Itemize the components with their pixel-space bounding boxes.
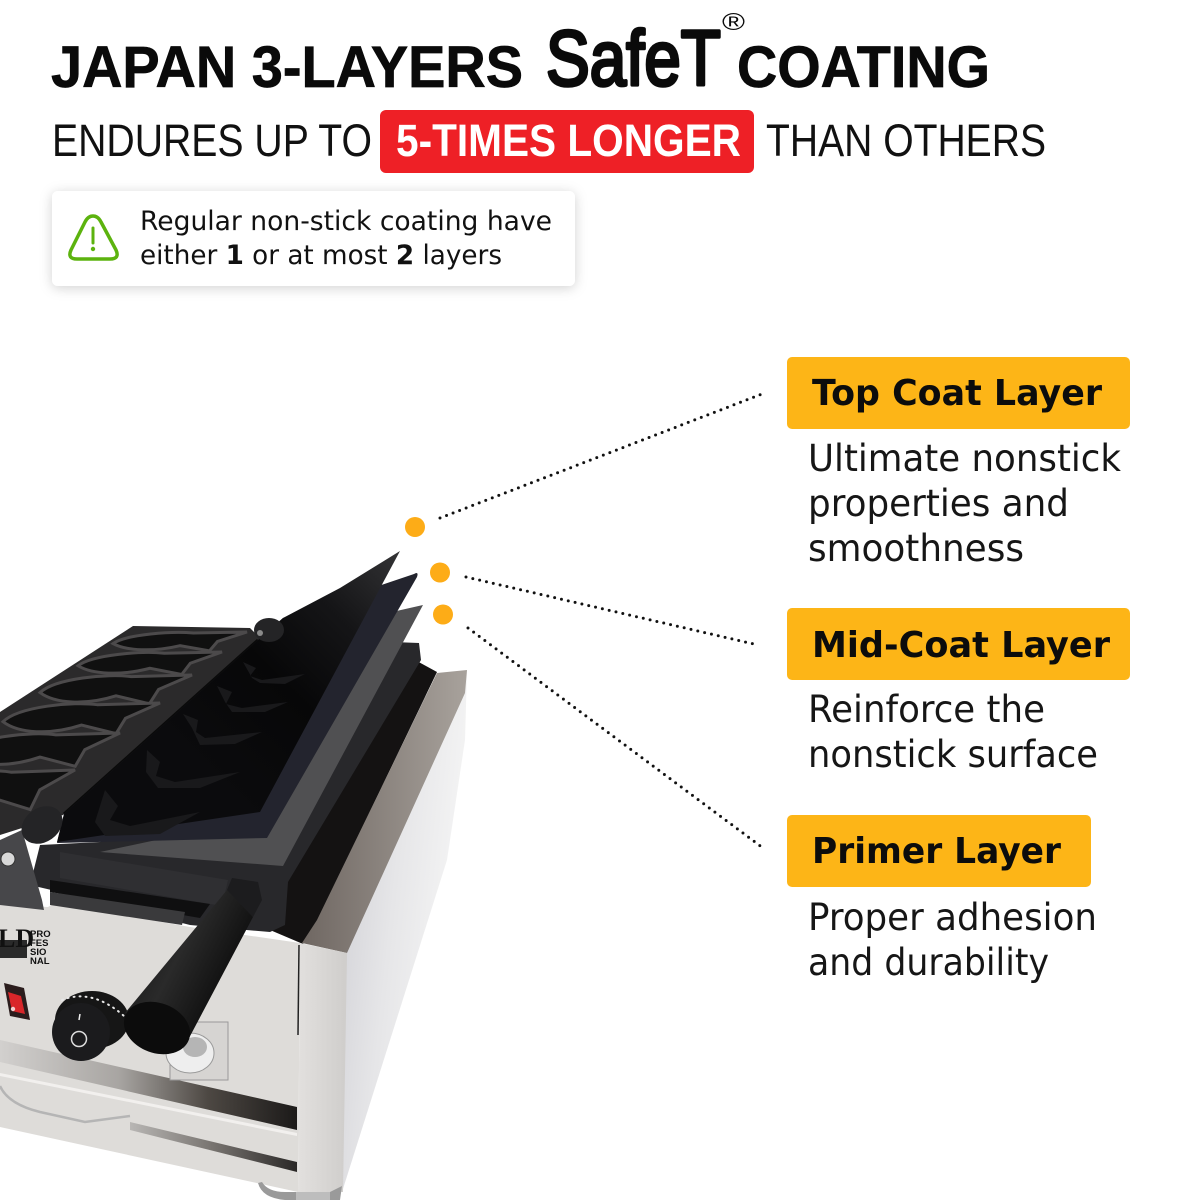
left baking plate [0,626,262,835]
power switch [4,983,30,1020]
callout: regular coating warning: Regular non-stick coating have [140,206,552,237]
brand logo: SIO [30,947,46,958]
machine inner slot [270,660,437,944]
subtitle: endures up to 5-times longer than others: 5-TIMES LONGER [396,115,741,166]
illustration: waffle machine with coating layers [0,551,467,1200]
drawer handle [0,1086,130,1122]
panel: primer layer [787,815,1097,984]
casters [258,1182,342,1200]
second layer sheet [57,573,418,843]
panel: top coat layer: properties and [808,482,1069,525]
front chrome stripes [0,1040,297,1172]
panel: mid-coat layer: Reinforce the [808,688,1045,731]
panel: mid-coat layer: nonstick surface [808,733,1098,776]
hinge line [64,640,258,814]
left plate fish moulds [0,632,247,810]
connector: top coat [440,394,762,518]
subtitle: endures up to 5-times longer than others [52,110,1046,173]
brand logo: NAL [30,956,50,967]
callout: regular coating warning: either 1 or at most 2 layers [140,240,502,271]
icon: warning triangle [70,216,117,259]
temperature knob [52,991,129,1061]
title: Japan 3-layers SafeT coating: SafeT [546,16,721,102]
machine right side panel [330,670,467,1192]
brand logo: PRO [30,929,51,940]
right plate fish moulds [95,662,305,836]
black press handle [116,878,262,1063]
connector: primer [468,628,763,848]
panel: top coat layer: Ultimate nonstick [808,437,1122,480]
front panel [0,903,300,1192]
marker: top coat dot [405,517,425,537]
panel: primer layer: Primer Layer [812,831,1061,872]
panel: top coat layer: smoothness [808,527,1024,570]
title: Japan 3-layers SafeT coating: COATING [737,35,990,100]
title: Japan 3-layers SafeT coating: JAPAN 3-LAYERS [51,35,523,100]
brand logo: FES [30,938,48,949]
machine casting [30,642,421,932]
panel: primer layer: and durability [808,941,1049,984]
front corner post [298,943,347,1192]
top layer sheet [57,551,400,842]
panel: mid-coat layer: Mid-Coat Layer [812,625,1110,666]
panel: mid-coat layer [787,608,1130,776]
panel: primer layer: Proper adhesion [808,896,1097,939]
machine rim [302,670,467,953]
hinge knuckles [14,618,284,852]
gauge [166,1022,228,1080]
connector: mid coat [466,577,758,645]
title: Japan 3-layers SafeT coating [51,9,990,102]
panel: top coat layer: Top Coat Layer [812,373,1102,414]
callout: regular coating warning [52,191,575,286]
title: Japan 3-layers SafeT coating: ® [722,9,745,36]
dark vent under plate [50,892,185,925]
brand logo [0,924,51,967]
panel: top coat layer [787,357,1130,570]
subtitle: endures up to 5-times longer than others: ENDURES UP TO [52,115,372,166]
grey hinge bracket [0,830,44,910]
subtitle: endures up to 5-times longer than others: THAN OTHERS [766,115,1046,166]
marker: mid coat dot [430,562,450,582]
marker: primer dot [433,604,453,624]
third layer sheet [100,605,423,866]
